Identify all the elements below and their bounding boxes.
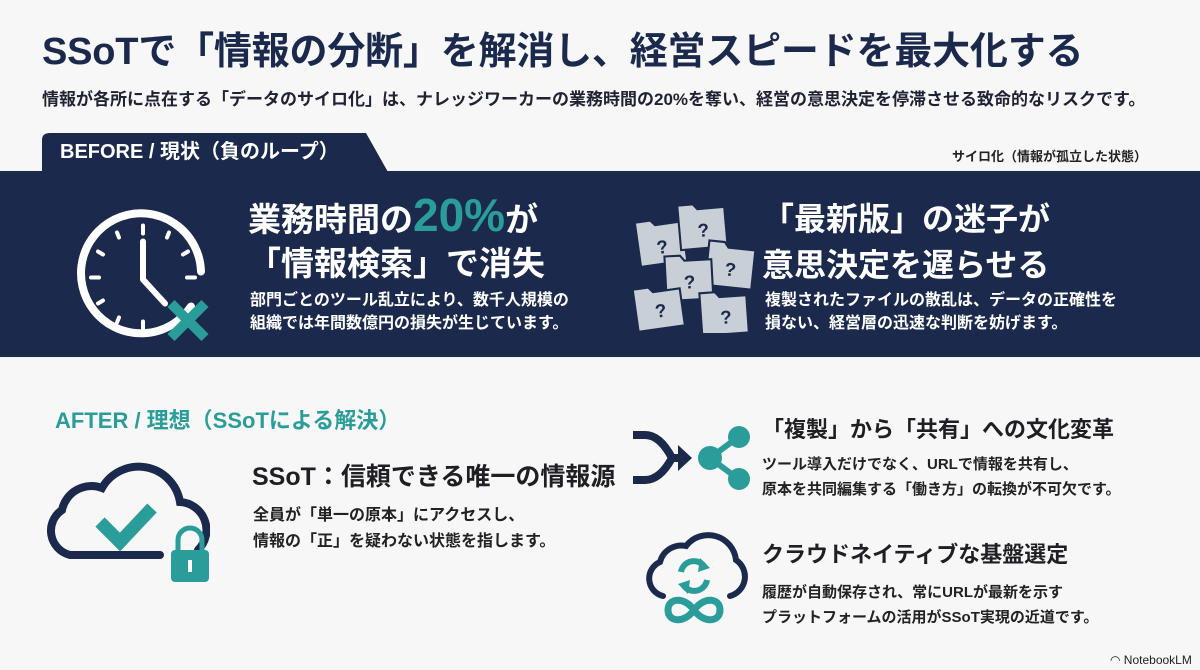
icon: scattered folders: ? xyxy=(683,271,696,293)
body cloud native: プラットフォームの活用がSSoT実現の近道です。 xyxy=(762,609,1098,626)
heading right: 「最新版」の迷子が xyxy=(762,201,1050,237)
silo caption: サイロ化（情報が孤立した状態） xyxy=(952,149,1147,164)
body SSoT xyxy=(253,506,555,550)
body SSoT: 全員が「単一の原本」にアクセスし、 xyxy=(253,507,524,524)
body cloud native xyxy=(762,584,1098,626)
heading cloud native: クラウドネイティブな基盤選定 xyxy=(762,542,1068,567)
before tab xyxy=(42,133,388,171)
icon: scattered folders: ? xyxy=(720,306,732,328)
body text left: 組織では年間数億円の損失が生じています。 xyxy=(250,315,568,332)
body SSoT: 情報の「正」を疑わない状態を指します。 xyxy=(253,533,555,550)
body culture xyxy=(762,456,1121,498)
icon: cloud with check and lock xyxy=(46,462,210,582)
icon: scattered folders: ? xyxy=(655,236,669,258)
heading: 20%: 業務時間の20%が xyxy=(248,189,538,241)
body text left: 部門ごとのツール乱立により、数千人規模の xyxy=(250,292,569,309)
icon: scattered folders: ? xyxy=(654,299,668,322)
body text right: 損ない、経営層の迅速な判断を妨げます。 xyxy=(765,315,1067,332)
before tab label: BEFORE / 現状（負のループ） xyxy=(60,141,339,163)
title: SSoTで「情報の分断」を解消し、経営スピードを最大化する xyxy=(42,31,1083,73)
heading culture: 「複製」から「共有」への文化変革 xyxy=(762,417,1114,442)
logo: NotebookLM: ◠ NotebookLM xyxy=(1110,653,1192,667)
body text right: 複製されたファイルの散乱は、データの正確性を xyxy=(765,292,1117,309)
icon: scattered folders xyxy=(634,206,755,333)
body culture: 原本を共同編集する「働き方」の転換が不可欠です。 xyxy=(762,481,1121,498)
heading right xyxy=(762,201,1050,283)
heading line 2: 「情報検索」で消失 xyxy=(248,245,545,282)
icon: scattered folders: ? xyxy=(724,258,737,280)
heading right: 意思決定を遅らせる xyxy=(762,247,1049,283)
body text right xyxy=(765,291,1117,332)
icon: merge to share xyxy=(633,426,750,490)
heading SSoT: SSoT：信頼できる唯一の情報源 xyxy=(252,463,615,491)
icon: cloud sync infinity xyxy=(646,532,748,624)
subtitle: 情報が各所に点在する「データのサイロ化」は、ナレッジワーカーの業務時間の20%を奪い、経営の意思決定を停滞させる致命的なリスクです。 xyxy=(42,90,1145,109)
body culture: ツール導入だけでなく、URLで情報を共有し、 xyxy=(762,456,1078,473)
icon: scattered folders: ? xyxy=(697,219,710,241)
icon: clock with x xyxy=(77,209,208,341)
body text left xyxy=(250,291,569,332)
body cloud native: 履歴が自動保存され、常にURLが最新を示す xyxy=(762,584,1063,601)
panel: before banner xyxy=(0,171,1200,357)
after heading: AFTER / 理想（SSoTによる解決） xyxy=(55,408,400,433)
